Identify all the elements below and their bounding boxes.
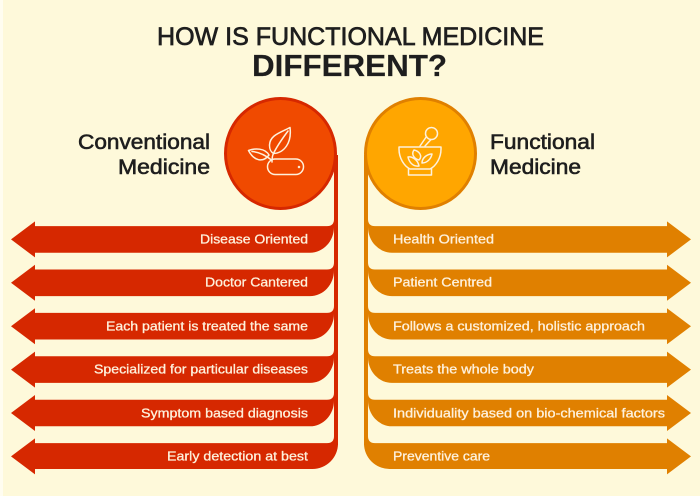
title: DIFFERENT? xyxy=(252,48,447,83)
conventional labels: Specialized for particular diseases xyxy=(94,362,309,376)
functional labels: Patient Centred xyxy=(393,274,492,290)
heading: functional medicine: Medicine xyxy=(490,156,581,179)
conventional labels: Early detection at best xyxy=(167,448,308,464)
heading: conventional medicine: Medicine xyxy=(118,156,210,179)
heading: functional medicine: Functional xyxy=(490,131,595,154)
conventional labels xyxy=(94,232,309,464)
heading: conventional medicine: Conventional xyxy=(78,131,210,154)
title: HOW IS FUNCTIONAL MEDICINE xyxy=(157,23,544,51)
functional labels: Health Oriented xyxy=(393,232,494,246)
conventional labels: Each patient is treated the same xyxy=(106,318,308,334)
icon: leaves and capsule in red circle xyxy=(226,98,336,208)
title xyxy=(157,23,544,83)
functional labels xyxy=(393,232,666,464)
panel: conventional arrows xyxy=(11,155,338,474)
heading: conventional medicine xyxy=(78,131,210,179)
conventional labels: Disease Oriented xyxy=(200,232,308,246)
functional labels: Individuality based on bio-chemical factors xyxy=(393,406,666,420)
panel: functional arrows xyxy=(364,155,691,474)
functional labels: Follows a customized, holistic approach xyxy=(393,318,645,334)
functional labels: Preventive care xyxy=(393,448,490,464)
icon: mortar and pestle in orange circle xyxy=(366,98,476,208)
conventional labels: Doctor Cantered xyxy=(205,274,308,290)
functional labels: Treats the whole body xyxy=(393,362,535,376)
heading: functional medicine xyxy=(490,131,595,179)
conventional labels: Symptom based diagnosis xyxy=(141,406,309,420)
